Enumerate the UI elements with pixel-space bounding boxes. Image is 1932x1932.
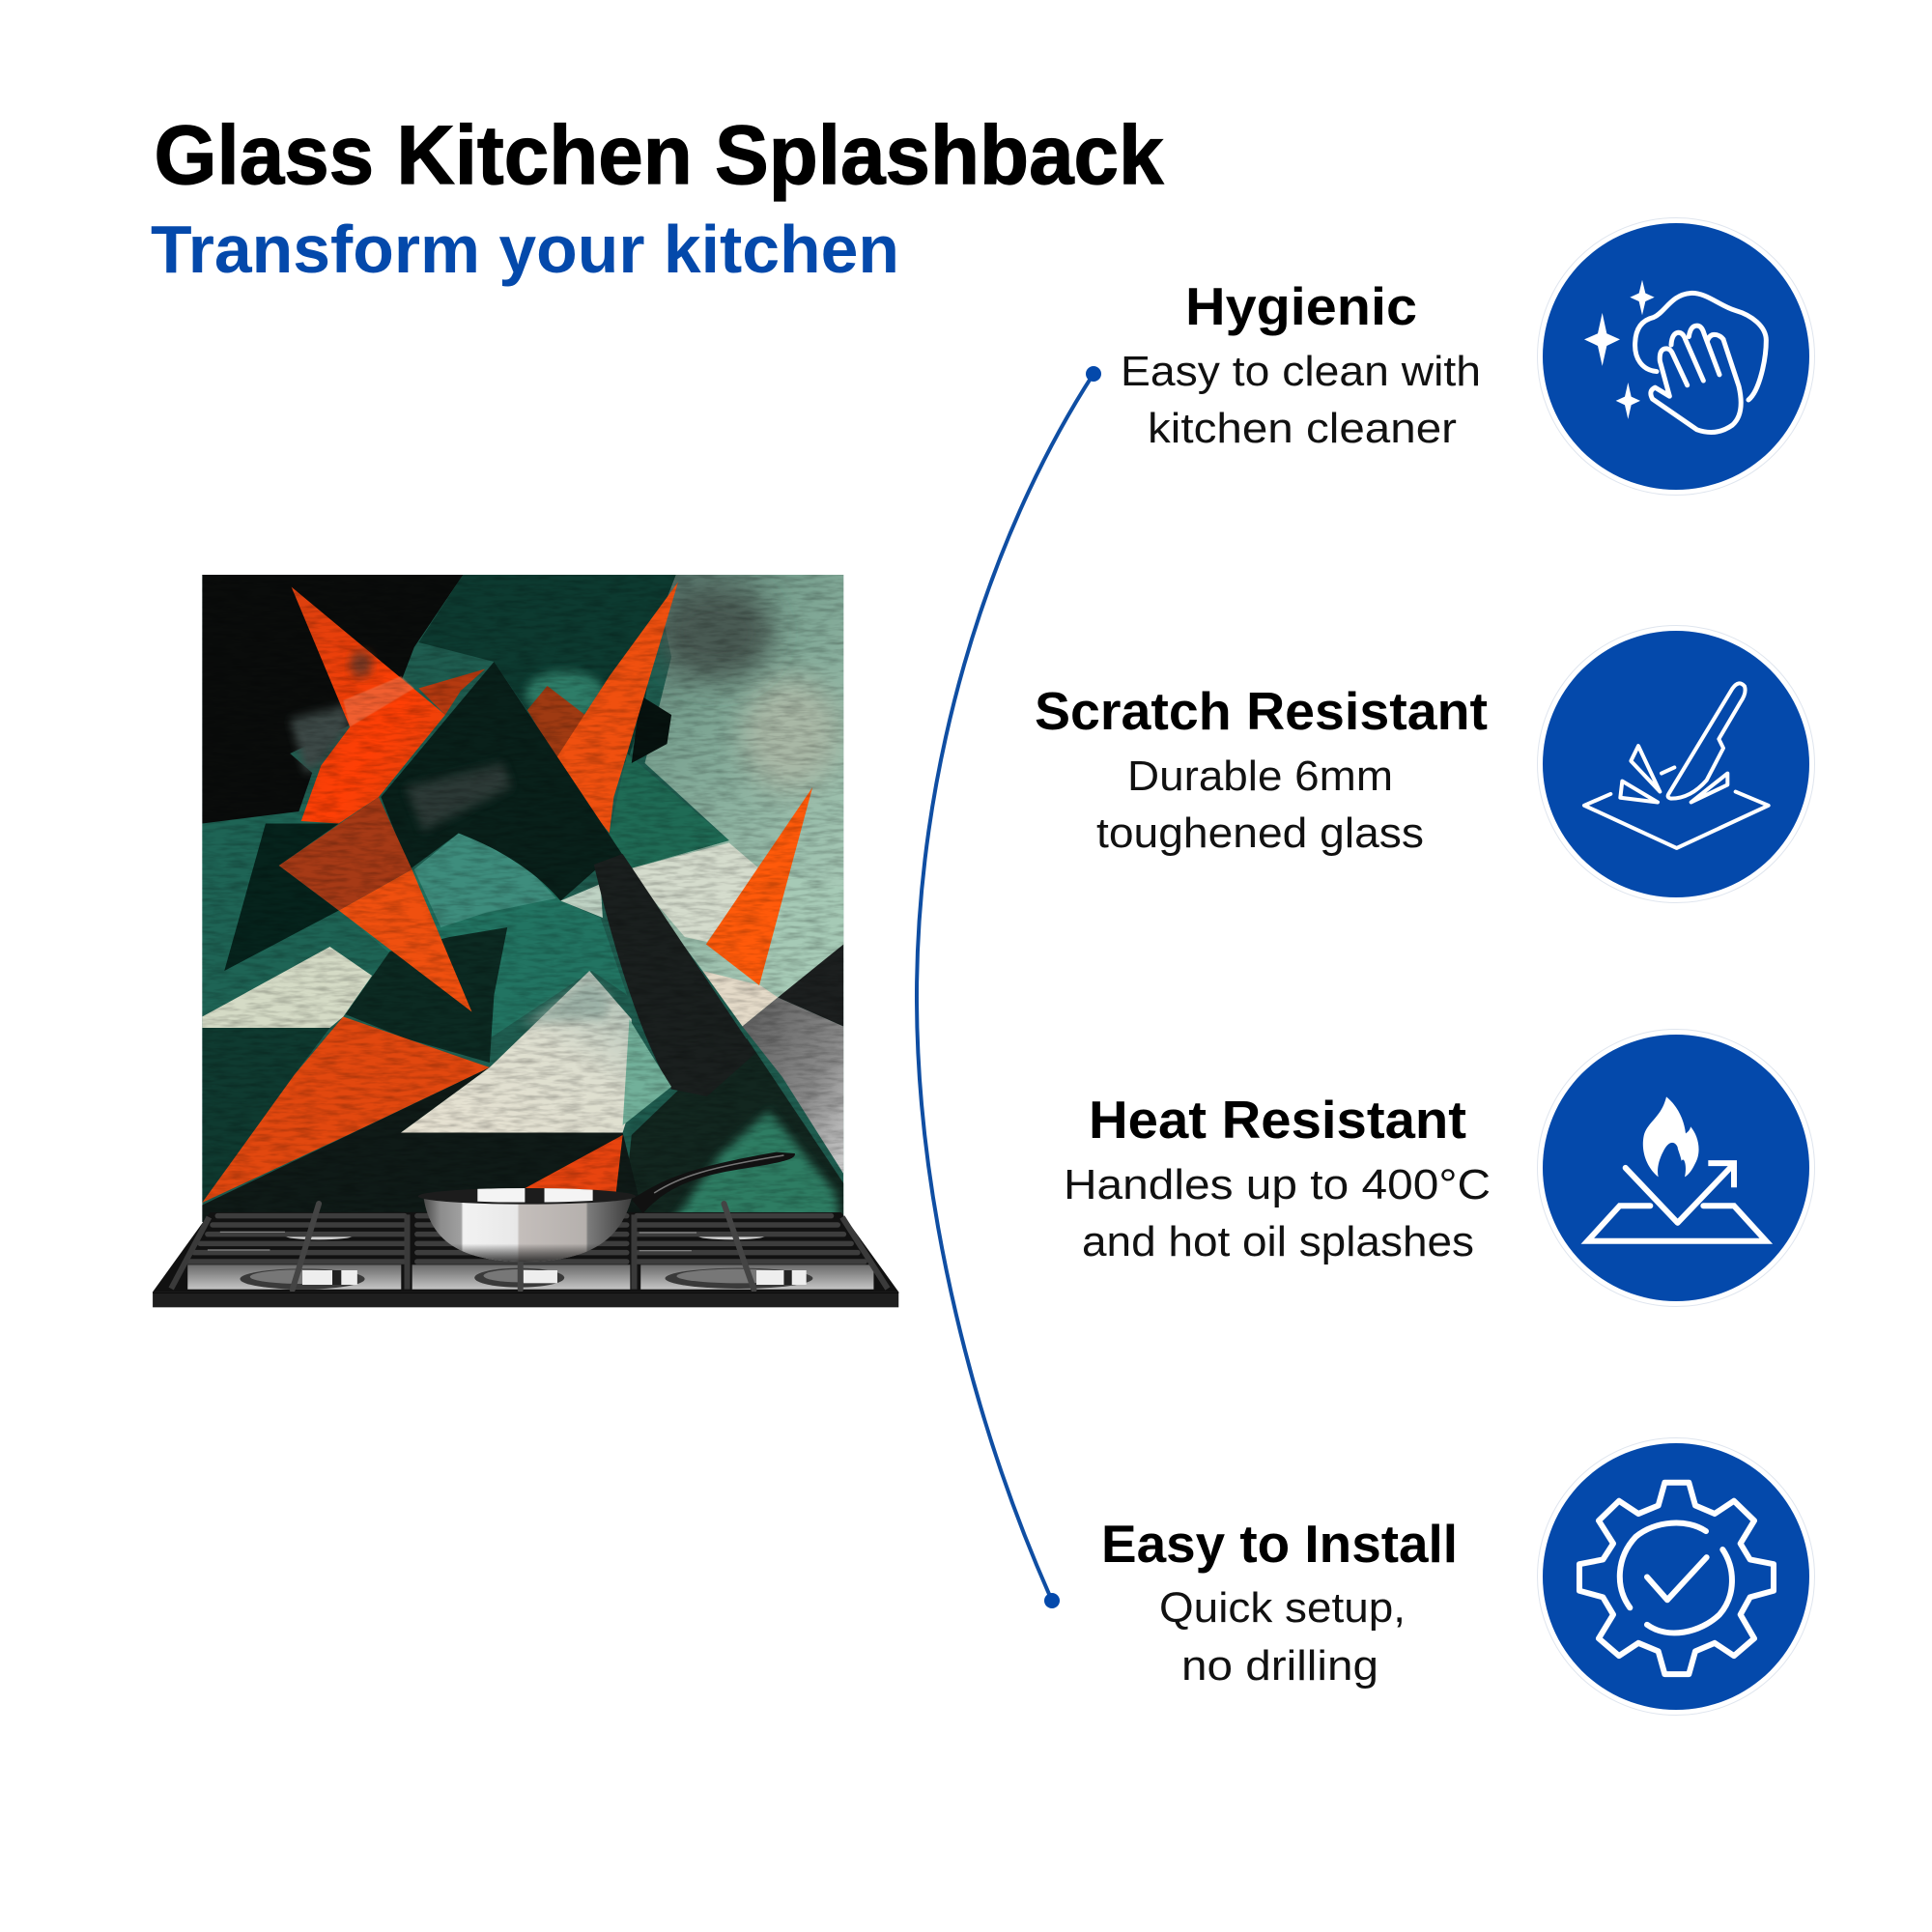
feature: scratch resistant: [1035, 681, 1488, 857]
hob steel panels: [187, 1264, 873, 1290]
icon: flame and heat deflection: [1538, 1030, 1814, 1306]
feature: heat resistant: Heat Resistant: [1089, 1090, 1466, 1150]
icon: gear with checkmark: [1538, 1437, 1814, 1716]
feature: hygienic: Hygienic: [1185, 276, 1417, 336]
connector curve: [917, 366, 1101, 1608]
feature: scratch resistant: toughened glass: [1096, 810, 1424, 857]
feature: heat resistant: and hot oil splashes: [1082, 1218, 1474, 1265]
burners: [240, 1232, 812, 1290]
feature: hygienic: Easy to clean with: [1121, 348, 1481, 395]
abstract glass splashback panel: [202, 575, 843, 1222]
splashback and hob illustration: [153, 575, 898, 1307]
feature: easy to install: no drilling: [1181, 1642, 1378, 1690]
feature: hygienic: [1121, 276, 1481, 452]
title: Glass Kitchen Splashback: [155, 109, 1164, 202]
feature: easy to install: Quick setup,: [1159, 1584, 1406, 1632]
feature: heat resistant: Handles up to 400°C: [1064, 1161, 1491, 1208]
icon: knife scratching glass: [1538, 626, 1814, 902]
feature: easy to install: Easy to Install: [1101, 1514, 1458, 1574]
subtitle: Transform your kitchen: [151, 212, 899, 287]
feature: scratch resistant: Durable 6mm: [1127, 753, 1393, 800]
gas hob: [153, 1204, 898, 1307]
feature: easy to install: [1101, 1514, 1458, 1690]
feature: scratch resistant: Scratch Resistant: [1035, 681, 1488, 741]
frying pan: [418, 1152, 795, 1262]
icon: cleaning hand with sparkles: [1538, 218, 1814, 495]
feature: hygienic: kitchen cleaner: [1148, 405, 1457, 452]
grates: [171, 1204, 888, 1290]
feature: heat resistant: [1064, 1090, 1491, 1265]
